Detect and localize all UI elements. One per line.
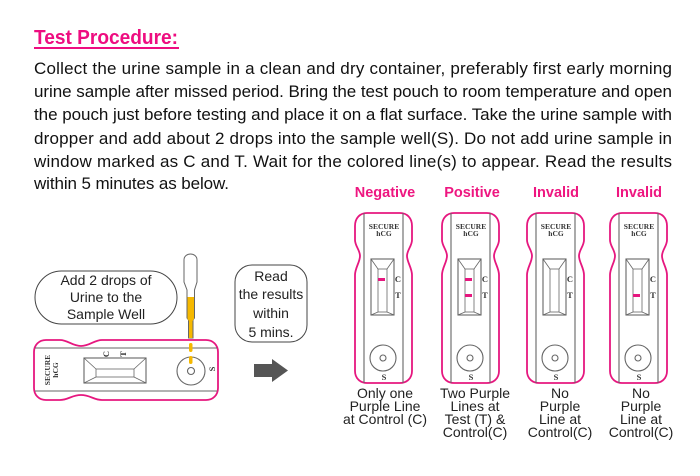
result: invalid, test line only: Control(C)	[609, 424, 673, 440]
result: positive	[440, 185, 510, 440]
result: negative: C	[395, 274, 401, 284]
result: invalid, no lines: SECURE	[541, 222, 571, 231]
result: invalid, no lines: C	[567, 274, 573, 284]
result: invalid, no lines: Invalid	[533, 185, 579, 201]
result: negative: Negative	[355, 185, 415, 201]
result: positive: Test (T) &	[445, 411, 506, 427]
result: invalid, no lines	[527, 185, 592, 440]
callout: read the results	[235, 265, 307, 342]
callout: read the results: Read	[254, 268, 288, 284]
procedure text block: window marked as C and T. Wait for the colored line(s) to appear. Read the results	[33, 152, 672, 171]
result: invalid, test line only: Line at	[620, 411, 662, 427]
title: Test Procedure:	[34, 27, 178, 49]
result: invalid, test line only: T	[650, 290, 656, 300]
result: positive: S	[469, 372, 474, 382]
callout: add 2 drops: Sample Well	[67, 306, 145, 322]
procedure text block: Collect the urine sample in a clean and dry container, preferably first early morning	[34, 59, 672, 78]
horizontal test device: S	[207, 366, 217, 371]
result: positive: hCG	[463, 229, 479, 238]
horizontal test device: T	[118, 351, 128, 357]
procedure text block: urine sample after missed period. Bring the test pouch to room temperature and open	[34, 82, 672, 101]
result: positive: Positive	[444, 185, 500, 201]
result: positive: SECURE	[456, 222, 486, 231]
result: negative: hCG	[376, 229, 392, 238]
result: invalid, no lines: Control(C)	[528, 424, 592, 440]
result: invalid, test line only: Purple	[621, 398, 661, 414]
result: invalid, no lines: S	[554, 372, 559, 382]
result: negative: SECURE	[369, 222, 399, 231]
horizontal test device: hCG	[51, 362, 60, 378]
result: invalid, test line only: hCG	[631, 229, 647, 238]
callout: add 2 drops	[35, 271, 177, 324]
result: positive: Control(C)	[443, 424, 507, 440]
result: invalid, test line only: Invalid	[616, 185, 662, 201]
result: negative: Purple Line	[350, 398, 421, 414]
result: invalid, no lines: Purple	[540, 398, 580, 414]
callout: add 2 drops: Add 2 drops of	[60, 272, 152, 288]
callout: read the results: within	[252, 305, 289, 321]
result: negative: T	[395, 290, 401, 300]
procedure text block	[33, 59, 672, 193]
result: positive: C	[482, 274, 488, 284]
result: invalid, test line only	[609, 185, 673, 440]
result: invalid, test line only: C	[650, 274, 656, 284]
result: negative: S	[382, 372, 387, 382]
procedure text block: dropper and add about 2 drops into the sample well(S). Do not add urine sample in	[34, 129, 672, 148]
arrow	[254, 359, 288, 382]
result: invalid, no lines: T	[567, 290, 573, 300]
icon: dropper with urine drops	[184, 254, 197, 364]
procedure text block: within 5 minutes as below.	[33, 174, 229, 193]
horizontal test device: C	[101, 351, 111, 357]
result: positive: Lines at	[450, 398, 500, 414]
result: invalid, no lines: Line at	[539, 411, 581, 427]
result: invalid, no lines: hCG	[548, 229, 564, 238]
callout: add 2 drops: Urine to the	[70, 289, 142, 305]
result: negative: Only one	[357, 385, 413, 401]
procedure text block: the pouch just before testing and place it on a flat surface. Take the urine sample with	[34, 105, 672, 124]
result: positive: Two Purple	[440, 385, 510, 401]
callout: read the results: the results	[239, 286, 303, 302]
callout: read the results: 5 mins.	[248, 324, 294, 340]
result: negative	[343, 185, 427, 427]
horizontal test device: SECURE	[43, 355, 52, 385]
result: positive: T	[482, 290, 488, 300]
result: negative: at Control (C)	[343, 411, 427, 427]
result: invalid, test line only: No	[632, 385, 650, 401]
horizontal test device	[34, 340, 218, 400]
result: invalid, test line only: S	[637, 372, 642, 382]
result: invalid, test line only: SECURE	[624, 222, 654, 231]
result: invalid, no lines: No	[551, 385, 569, 401]
